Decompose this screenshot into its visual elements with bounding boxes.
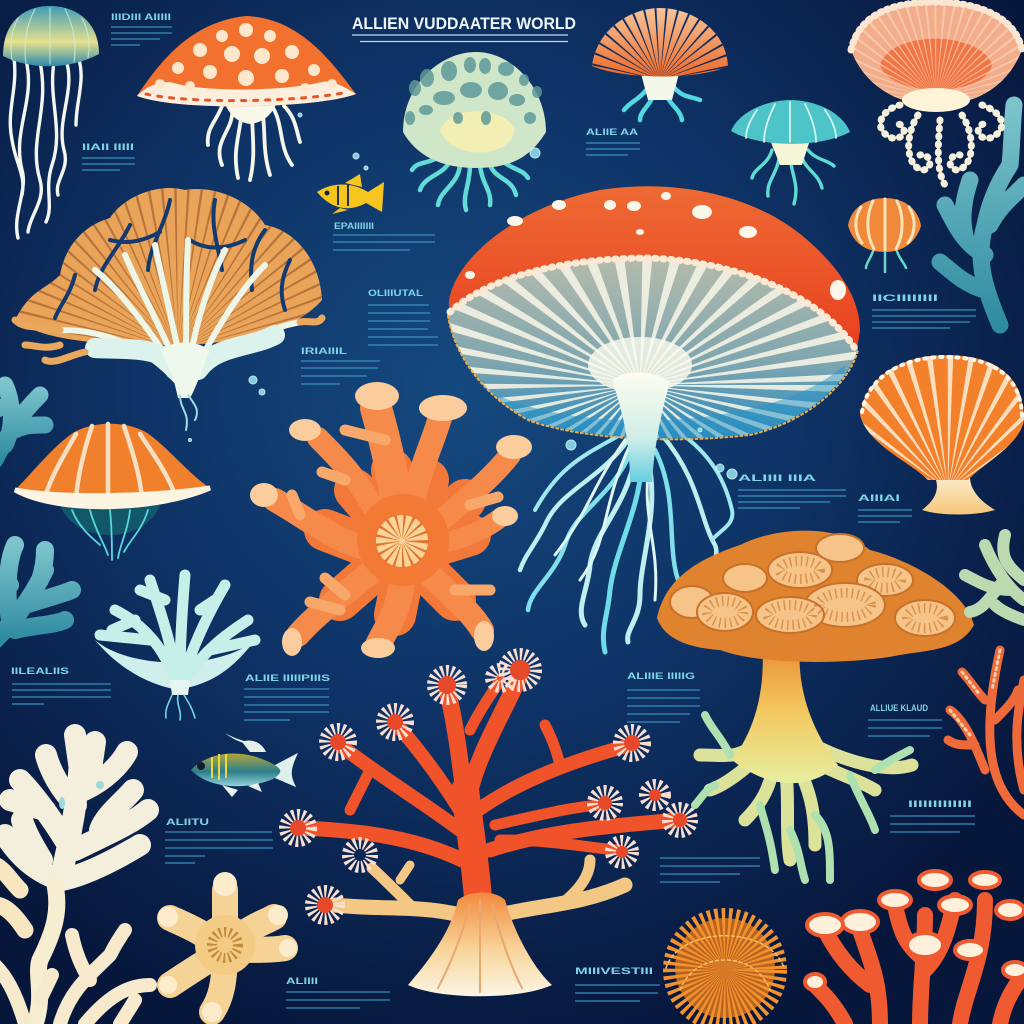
jellyfish: cream teal centre	[403, 52, 546, 210]
trunk and branches	[300, 675, 680, 930]
label: under fish	[333, 221, 435, 250]
base skirt	[408, 892, 552, 996]
main tentacles	[520, 425, 732, 652]
label: mushroom right: ALLIUE KLAUD	[870, 703, 928, 713]
label: scallop left	[738, 473, 846, 508]
stem	[732, 640, 838, 783]
gill underside	[447, 248, 858, 438]
label: pale coral right	[244, 673, 330, 720]
red coral: right edge	[948, 650, 1024, 815]
label: scallop bottom	[858, 493, 912, 522]
fan jelly: top right coral	[851, 2, 1022, 185]
red coral: bottom centre	[285, 654, 692, 996]
fan coral: top orange	[592, 8, 728, 122]
label: under fish: EPAIIIIIII	[334, 221, 374, 231]
arm bases	[325, 470, 470, 615]
label: centre: OLIIIUTAL	[368, 288, 424, 298]
label: centre	[368, 288, 438, 345]
pale coral: left	[95, 575, 255, 720]
jellyfish: small cyan	[731, 100, 850, 204]
cap	[449, 186, 860, 350]
label: red coral right	[575, 966, 660, 1001]
gill edge	[448, 316, 858, 439]
scallop shell: right	[860, 355, 1024, 514]
label: white coral right: ALIITU	[166, 817, 209, 827]
label: white coral right	[165, 817, 273, 863]
coral knobs lower	[0, 930, 150, 1024]
fish: striped	[191, 733, 298, 797]
urchin: bottom	[666, 918, 784, 1018]
cap spots	[465, 192, 846, 300]
stem	[612, 373, 670, 482]
label: mushroom left	[627, 671, 700, 722]
label: red coral middle	[660, 858, 760, 882]
brain coral: left	[15, 188, 322, 440]
teal coral: right top	[940, 105, 1024, 325]
yellow lower branches	[335, 860, 625, 915]
cap rim	[450, 258, 856, 350]
polyp coral: bottom right	[805, 871, 1024, 1024]
teal coral: left upper	[0, 385, 45, 460]
striped jellyfish: left	[15, 424, 210, 560]
arm branches	[292, 430, 498, 610]
label: under amanita	[82, 142, 135, 170]
white stems	[15, 240, 322, 385]
jellyfish: top left	[3, 6, 99, 238]
star eye	[376, 515, 428, 567]
teal coral: left lower	[0, 545, 72, 640]
main mushroom jellyfish	[419, 186, 860, 652]
teal coral: right lower	[965, 535, 1024, 620]
title	[352, 15, 576, 42]
coral lobes	[15, 188, 322, 345]
orange mushroom coral: right	[657, 531, 974, 880]
shell jelly: small right	[848, 198, 921, 272]
label: right middle	[872, 293, 976, 328]
label: below brain coral: IRIAIIIL	[301, 346, 348, 356]
label: top right: IIIIIIIIIII	[905, 14, 961, 24]
label: left lower	[11, 666, 111, 704]
white coral: bottom left	[0, 735, 150, 1024]
label: mushroom left: ALIIIE IIIIIG	[627, 671, 695, 681]
label: scallop bottom: AIIIAI	[858, 493, 900, 503]
arms	[275, 408, 510, 645]
arm tips	[250, 382, 532, 658]
label: top left	[111, 12, 172, 45]
label: left lower: IILEALIIS	[11, 666, 69, 676]
label: mushroom right	[868, 703, 942, 736]
label: under amanita: IIAII IIIII	[82, 142, 134, 152]
label: red coral right: MIIIVESTIII	[575, 966, 653, 976]
label: right lower: IIIIIIIIIIIII	[908, 799, 972, 809]
label: below brain coral	[301, 346, 380, 384]
label: right middle: IICIIIIIIII	[872, 293, 938, 303]
label: bottom star	[286, 976, 390, 1008]
tentacles	[695, 715, 912, 880]
cap	[657, 531, 974, 662]
bubbles	[188, 113, 737, 479]
coral fan texture	[88, 260, 268, 440]
label: fan coral: ALIIE AA	[586, 127, 639, 137]
label: top right	[905, 14, 961, 42]
label: scallop left: ALIIII IIIA	[738, 473, 817, 483]
cap lobes	[670, 534, 955, 636]
star body	[357, 494, 449, 586]
sand star: bottom	[158, 872, 297, 1022]
frilled tips	[285, 654, 692, 919]
mushroom jelly: amanita top	[137, 16, 356, 180]
label: bottom star: ALIIII	[286, 976, 318, 986]
fish: yellow	[317, 174, 384, 214]
gill lines	[450, 260, 856, 438]
title: ALLIEN VUDDAATER WORLD	[352, 15, 576, 33]
label: right lower	[890, 799, 975, 832]
label: top left: IIIDIII AIIIII	[111, 12, 171, 22]
coral dark gaps	[55, 200, 290, 318]
label: pale coral right: ALIIE IIIIIPIIIS	[245, 673, 330, 683]
label: fan coral	[586, 127, 640, 155]
starfish: orange centre	[250, 382, 532, 658]
